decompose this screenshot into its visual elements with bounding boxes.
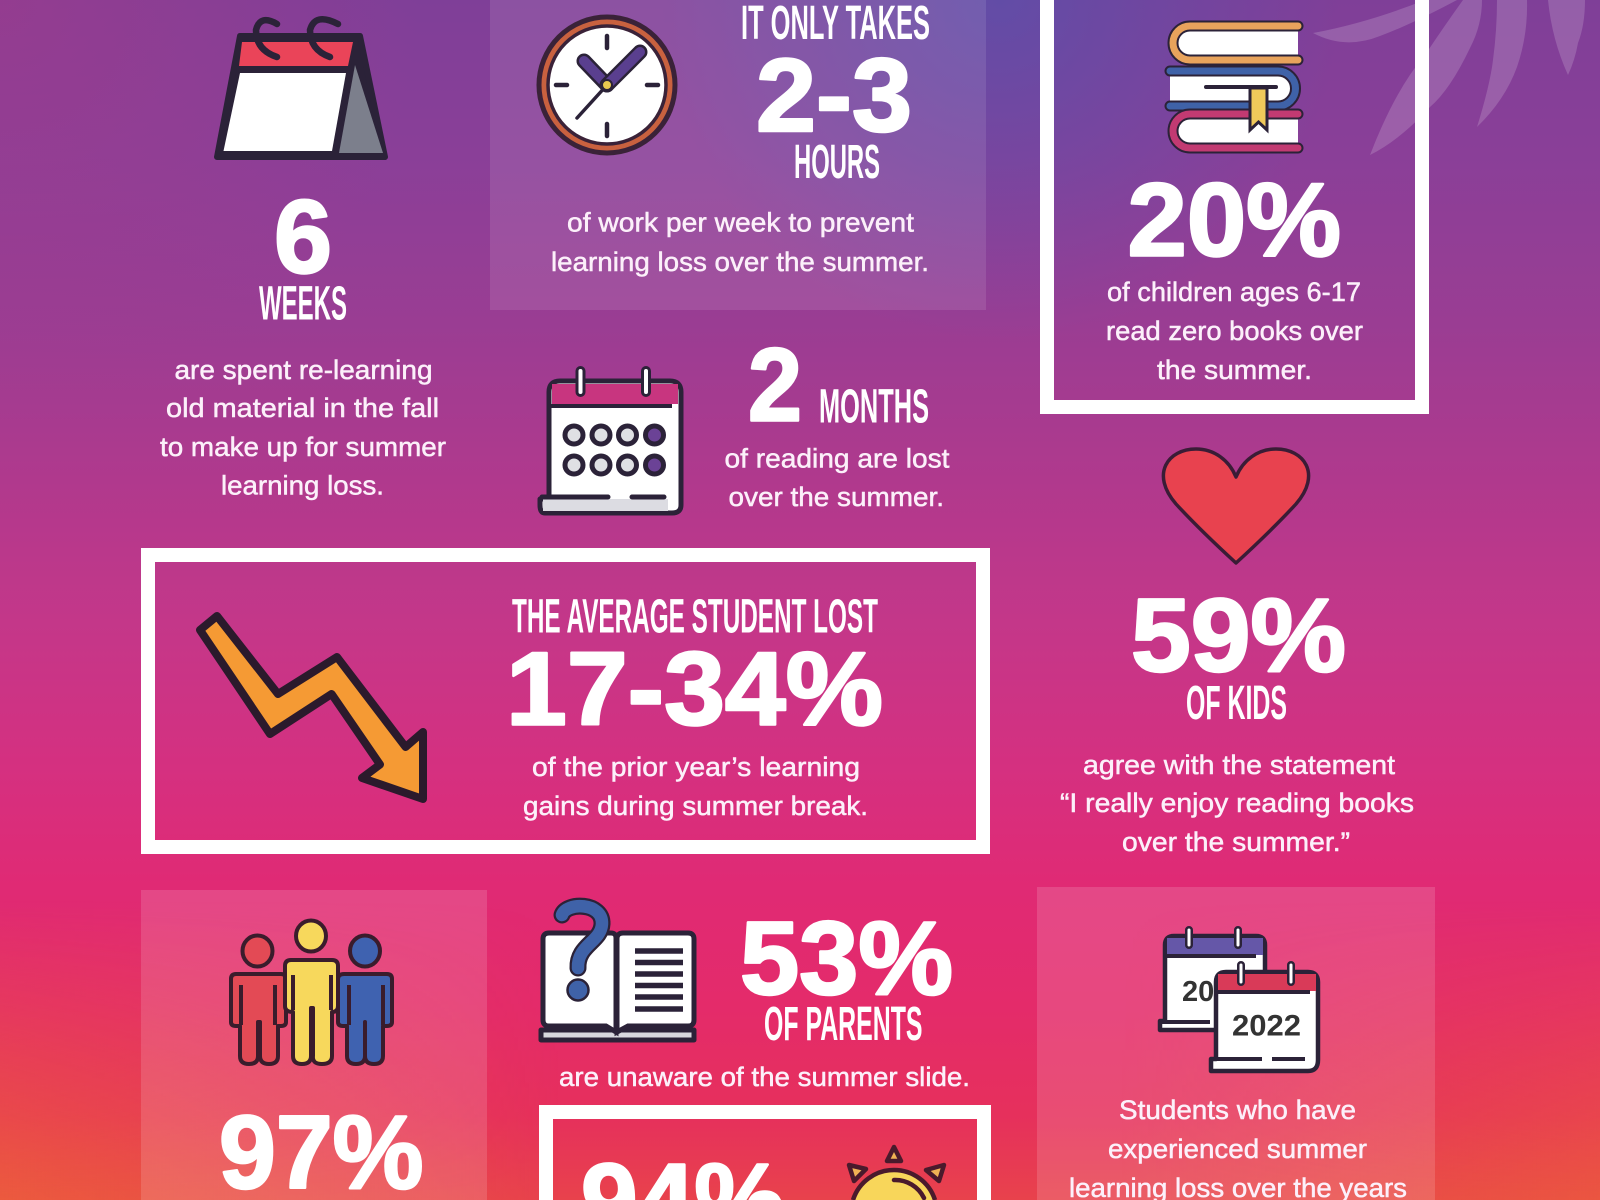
back calendar: 20 xyxy=(1182,976,1214,1008)
label: of parents: OF PARENTS xyxy=(764,998,922,1051)
block: 59 percent of kids xyxy=(1060,449,1414,857)
text: re-learning: old material in the fall xyxy=(166,393,439,423)
number: 20 percent: 20% xyxy=(1128,162,1341,278)
heading: the average student lost: THE AVERAGE STUDENT LOST xyxy=(512,590,878,644)
text: prior year xyxy=(523,752,868,821)
text: of reading: of reading are lost xyxy=(724,444,950,474)
block: 2 months xyxy=(540,328,950,513)
icon: desk calendar xyxy=(217,19,385,157)
icon: heart xyxy=(1163,449,1309,563)
front calendar xyxy=(1211,965,1318,1071)
block: 6 weeks: WEEKS xyxy=(259,278,347,330)
text: statement: over the summer.” xyxy=(1122,827,1350,857)
text: of work per week xyxy=(551,208,929,277)
panel: 94 percent xyxy=(546,1112,984,1200)
icon: month calendar xyxy=(540,371,681,513)
decorative leaves, top right xyxy=(1313,0,1585,155)
text: statement xyxy=(1060,750,1414,857)
label: months: MONTHS xyxy=(819,380,929,434)
number: 59 percent: 59% xyxy=(1131,578,1346,694)
panel: 2-3 hours: HOURS xyxy=(794,136,880,189)
text: re-learning xyxy=(160,355,446,500)
icon: open book with question mark xyxy=(541,906,694,1040)
label: of kids: OF KIDS xyxy=(1186,677,1287,730)
text: children xyxy=(1106,277,1363,385)
number: 2: 2 xyxy=(748,328,802,444)
text: re-learning: are spent re-learning xyxy=(174,355,432,385)
text: prior year: of the prior year’s learning xyxy=(532,752,860,782)
number: 6: 6 xyxy=(274,180,332,296)
panel: students xyxy=(1037,887,1435,1200)
text: children: of children ages 6-17 xyxy=(1107,277,1361,307)
number: 2-3: 2-3 xyxy=(756,38,912,154)
icon: clock xyxy=(539,17,675,153)
text: statement: “I really enjoy reading books xyxy=(1060,788,1414,818)
icon: three people xyxy=(231,920,392,1064)
text: re-learning: to make up for summer xyxy=(160,432,446,462)
block: 53 percent of parents xyxy=(541,901,970,1092)
text: re-learning: learning loss. xyxy=(221,470,384,500)
text: unaware: are unaware of the summer slide. xyxy=(559,1062,970,1092)
block: 6 weeks xyxy=(160,19,446,500)
text: of reading: over the summer. xyxy=(728,482,944,512)
text: students: Students who have xyxy=(1119,1095,1356,1125)
text: statement: agree with the statement xyxy=(1083,750,1396,780)
text: of work per week: learning loss over the summer. xyxy=(551,247,929,277)
panel: average student lost xyxy=(148,555,983,847)
panel: 2-3 hours xyxy=(490,0,986,310)
icon: two calendars xyxy=(1158,930,1318,1071)
front calendar: 2022 xyxy=(1232,1010,1301,1042)
number: 53 percent: 53% xyxy=(740,901,953,1017)
panel: 20 percent frame xyxy=(1047,0,1422,407)
text: children: the summer. xyxy=(1157,355,1312,385)
text: students xyxy=(1069,1095,1407,1200)
icon: falling arrow xyxy=(200,616,423,799)
back calendar xyxy=(1158,930,1265,1030)
number: 17-34 percent: 17-34% xyxy=(506,632,883,748)
text: of reading xyxy=(724,444,950,512)
panel: 97 percent xyxy=(141,890,487,1200)
icon: sun xyxy=(849,1147,944,1200)
text: of work per week: of work per week to prevent xyxy=(567,208,915,238)
text: prior year: gains during summer break. xyxy=(523,791,868,821)
text: students: experienced summer xyxy=(1108,1134,1367,1164)
icon: book stack xyxy=(1170,26,1298,148)
text: children: read zero books over xyxy=(1106,316,1363,346)
